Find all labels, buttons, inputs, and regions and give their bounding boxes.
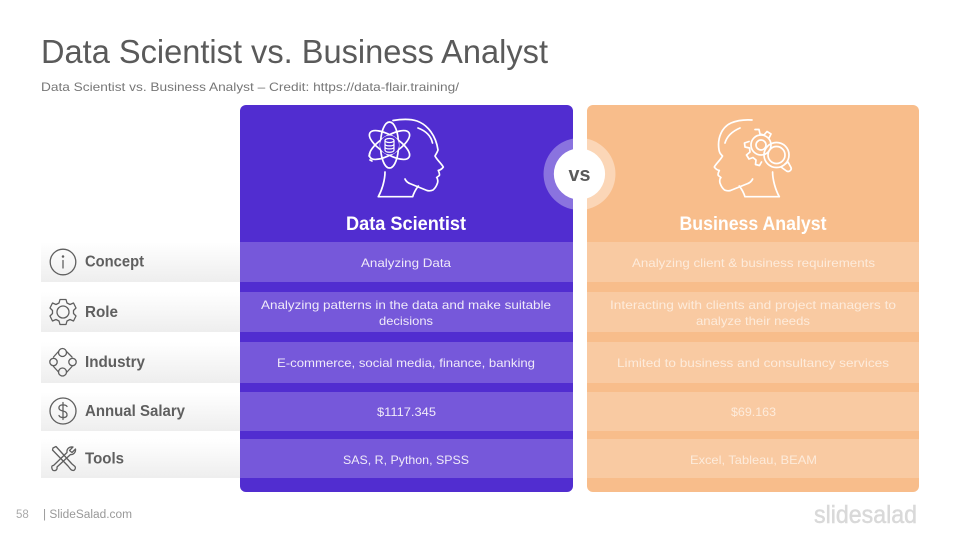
- row label: concept: [41, 242, 240, 282]
- row label: annual salary: Annual Salary: [85, 403, 185, 420]
- subtitle: Data Scientist vs. Business Analyst – Credit: https://data-flair.training/: [41, 80, 460, 94]
- icon: head with atom: [365, 119, 443, 197]
- panel: data scientist: [240, 105, 573, 492]
- row texts: Interacting with clients and project managers to: [610, 298, 896, 312]
- row texts: [610, 256, 896, 467]
- row texts: Analyzing patterns in the data and make suitable: [261, 298, 551, 312]
- icon: gear: [50, 300, 76, 324]
- row texts: decisions: [379, 314, 433, 328]
- icon: info: [50, 249, 76, 275]
- row texts: SAS, R, Python, SPSS: [343, 453, 469, 467]
- row texts: Analyzing client & business requirements: [632, 256, 875, 270]
- vs badge: vs: [568, 164, 590, 186]
- row bands: [240, 242, 573, 478]
- panel: business analyst: [587, 105, 919, 492]
- row texts: analyze their needs: [696, 314, 810, 328]
- row label: concept: Concept: [85, 254, 145, 270]
- icon: tools: [52, 446, 76, 471]
- vs badge: [544, 139, 615, 209]
- icon: connected nodes: [50, 348, 76, 376]
- row label: annual salary: [41, 392, 240, 431]
- row texts: [261, 256, 551, 467]
- footer site: | SlideSalad.com: [43, 509, 132, 521]
- atom orbits: [365, 122, 414, 168]
- row label: role: Role: [85, 304, 118, 321]
- row texts: $69.163: [731, 405, 776, 419]
- row texts: E-commerce, social media, finance, banking: [277, 356, 535, 370]
- icon: head with gear and magnifier: [714, 120, 791, 197]
- page number: 58: [16, 509, 29, 521]
- title: Data Scientist vs. Business Analyst: [41, 33, 548, 70]
- column heading: Data Scientist: [346, 214, 467, 235]
- icon: dollar: [50, 398, 76, 424]
- row texts: Analyzing Data: [361, 256, 451, 270]
- row label: role: [41, 292, 240, 332]
- column heading: Business Analyst: [680, 214, 827, 235]
- row bands: [587, 242, 919, 478]
- row label: tools: [41, 439, 240, 478]
- row texts: Limited to business and consultancy services: [617, 356, 889, 370]
- logo: slidesalad: [814, 501, 917, 529]
- row label: industry: [41, 342, 240, 383]
- row label: tools: Tools: [85, 450, 124, 468]
- row label: industry: Industry: [85, 354, 145, 371]
- row texts: Excel, Tableau, BEAM: [690, 453, 817, 467]
- row texts: $1117.345: [377, 405, 436, 419]
